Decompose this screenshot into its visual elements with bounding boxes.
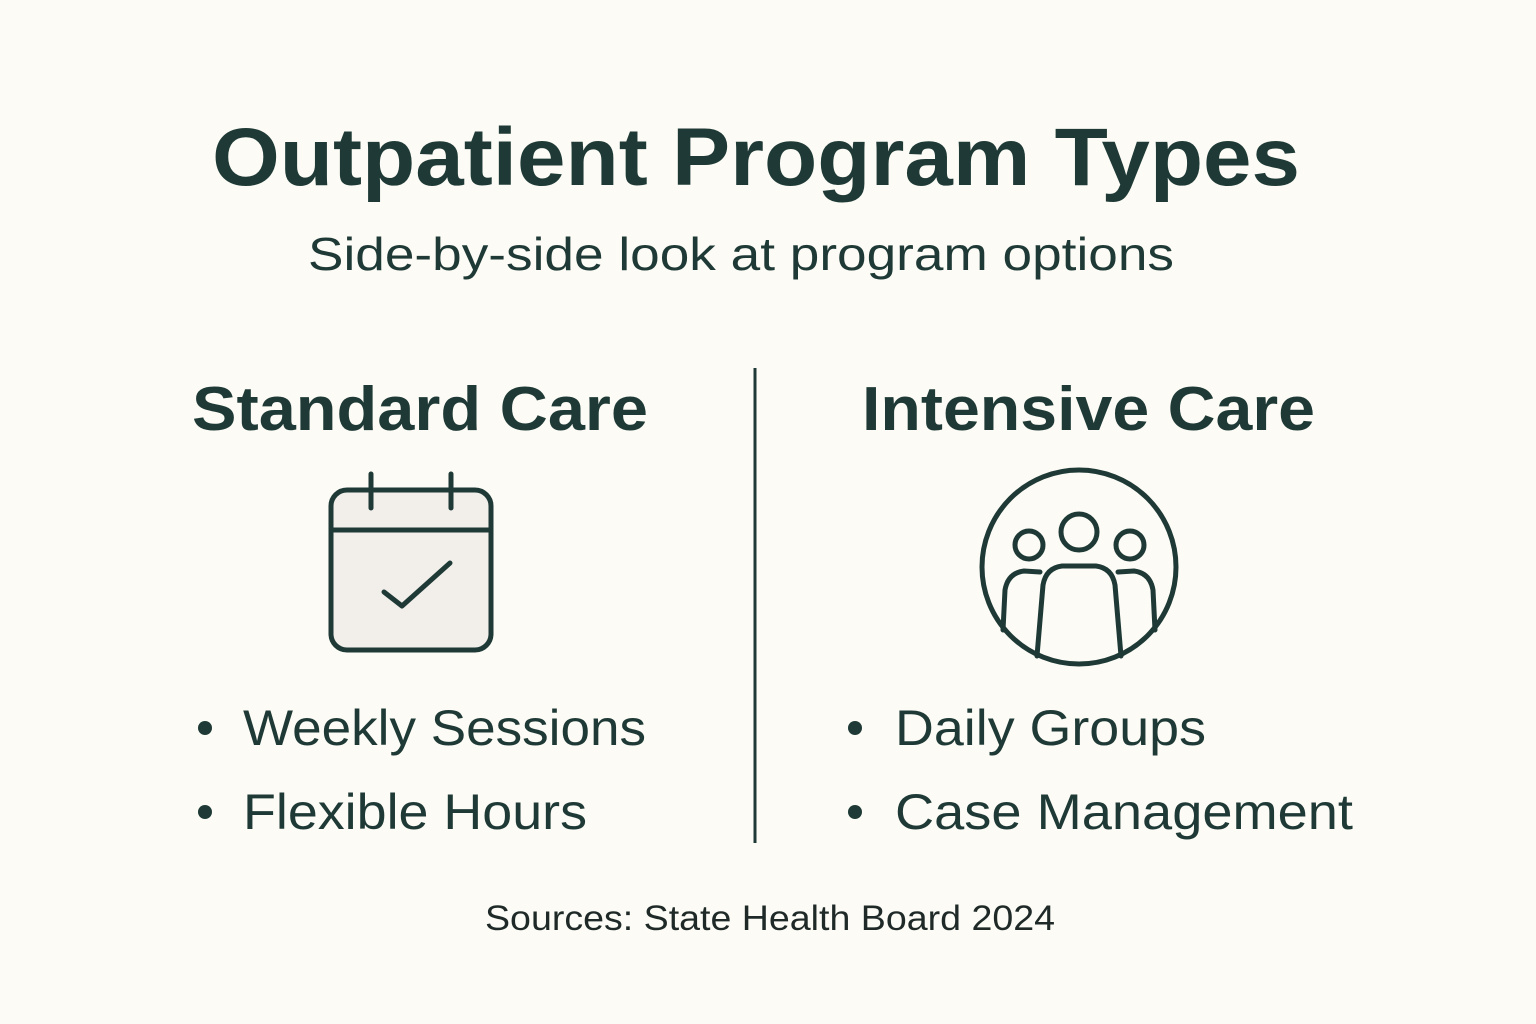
panel: intensive care <box>848 375 1353 840</box>
icon: calendar <box>331 474 491 650</box>
icon: group of people <box>982 470 1176 664</box>
sources: Sources: State Health Board 2024 <box>485 899 1055 938</box>
heading: intensive care: Intensive Care <box>862 375 1315 444</box>
heading: standard care: Standard Care <box>192 375 648 444</box>
list: standard care: Weekly Sessions <box>243 700 646 756</box>
panel: standard care <box>192 375 648 840</box>
list: intensive care <box>848 700 1353 840</box>
title: Outpatient Program Types <box>212 112 1300 203</box>
list: standard care <box>198 700 646 840</box>
list: standard care: Flexible Hours <box>243 784 587 840</box>
list: intensive care: Daily Groups <box>895 700 1206 756</box>
subtitle: Side-by-side look at program options <box>308 228 1174 280</box>
divider <box>754 368 756 843</box>
list: intensive care: Case Management <box>895 784 1353 840</box>
